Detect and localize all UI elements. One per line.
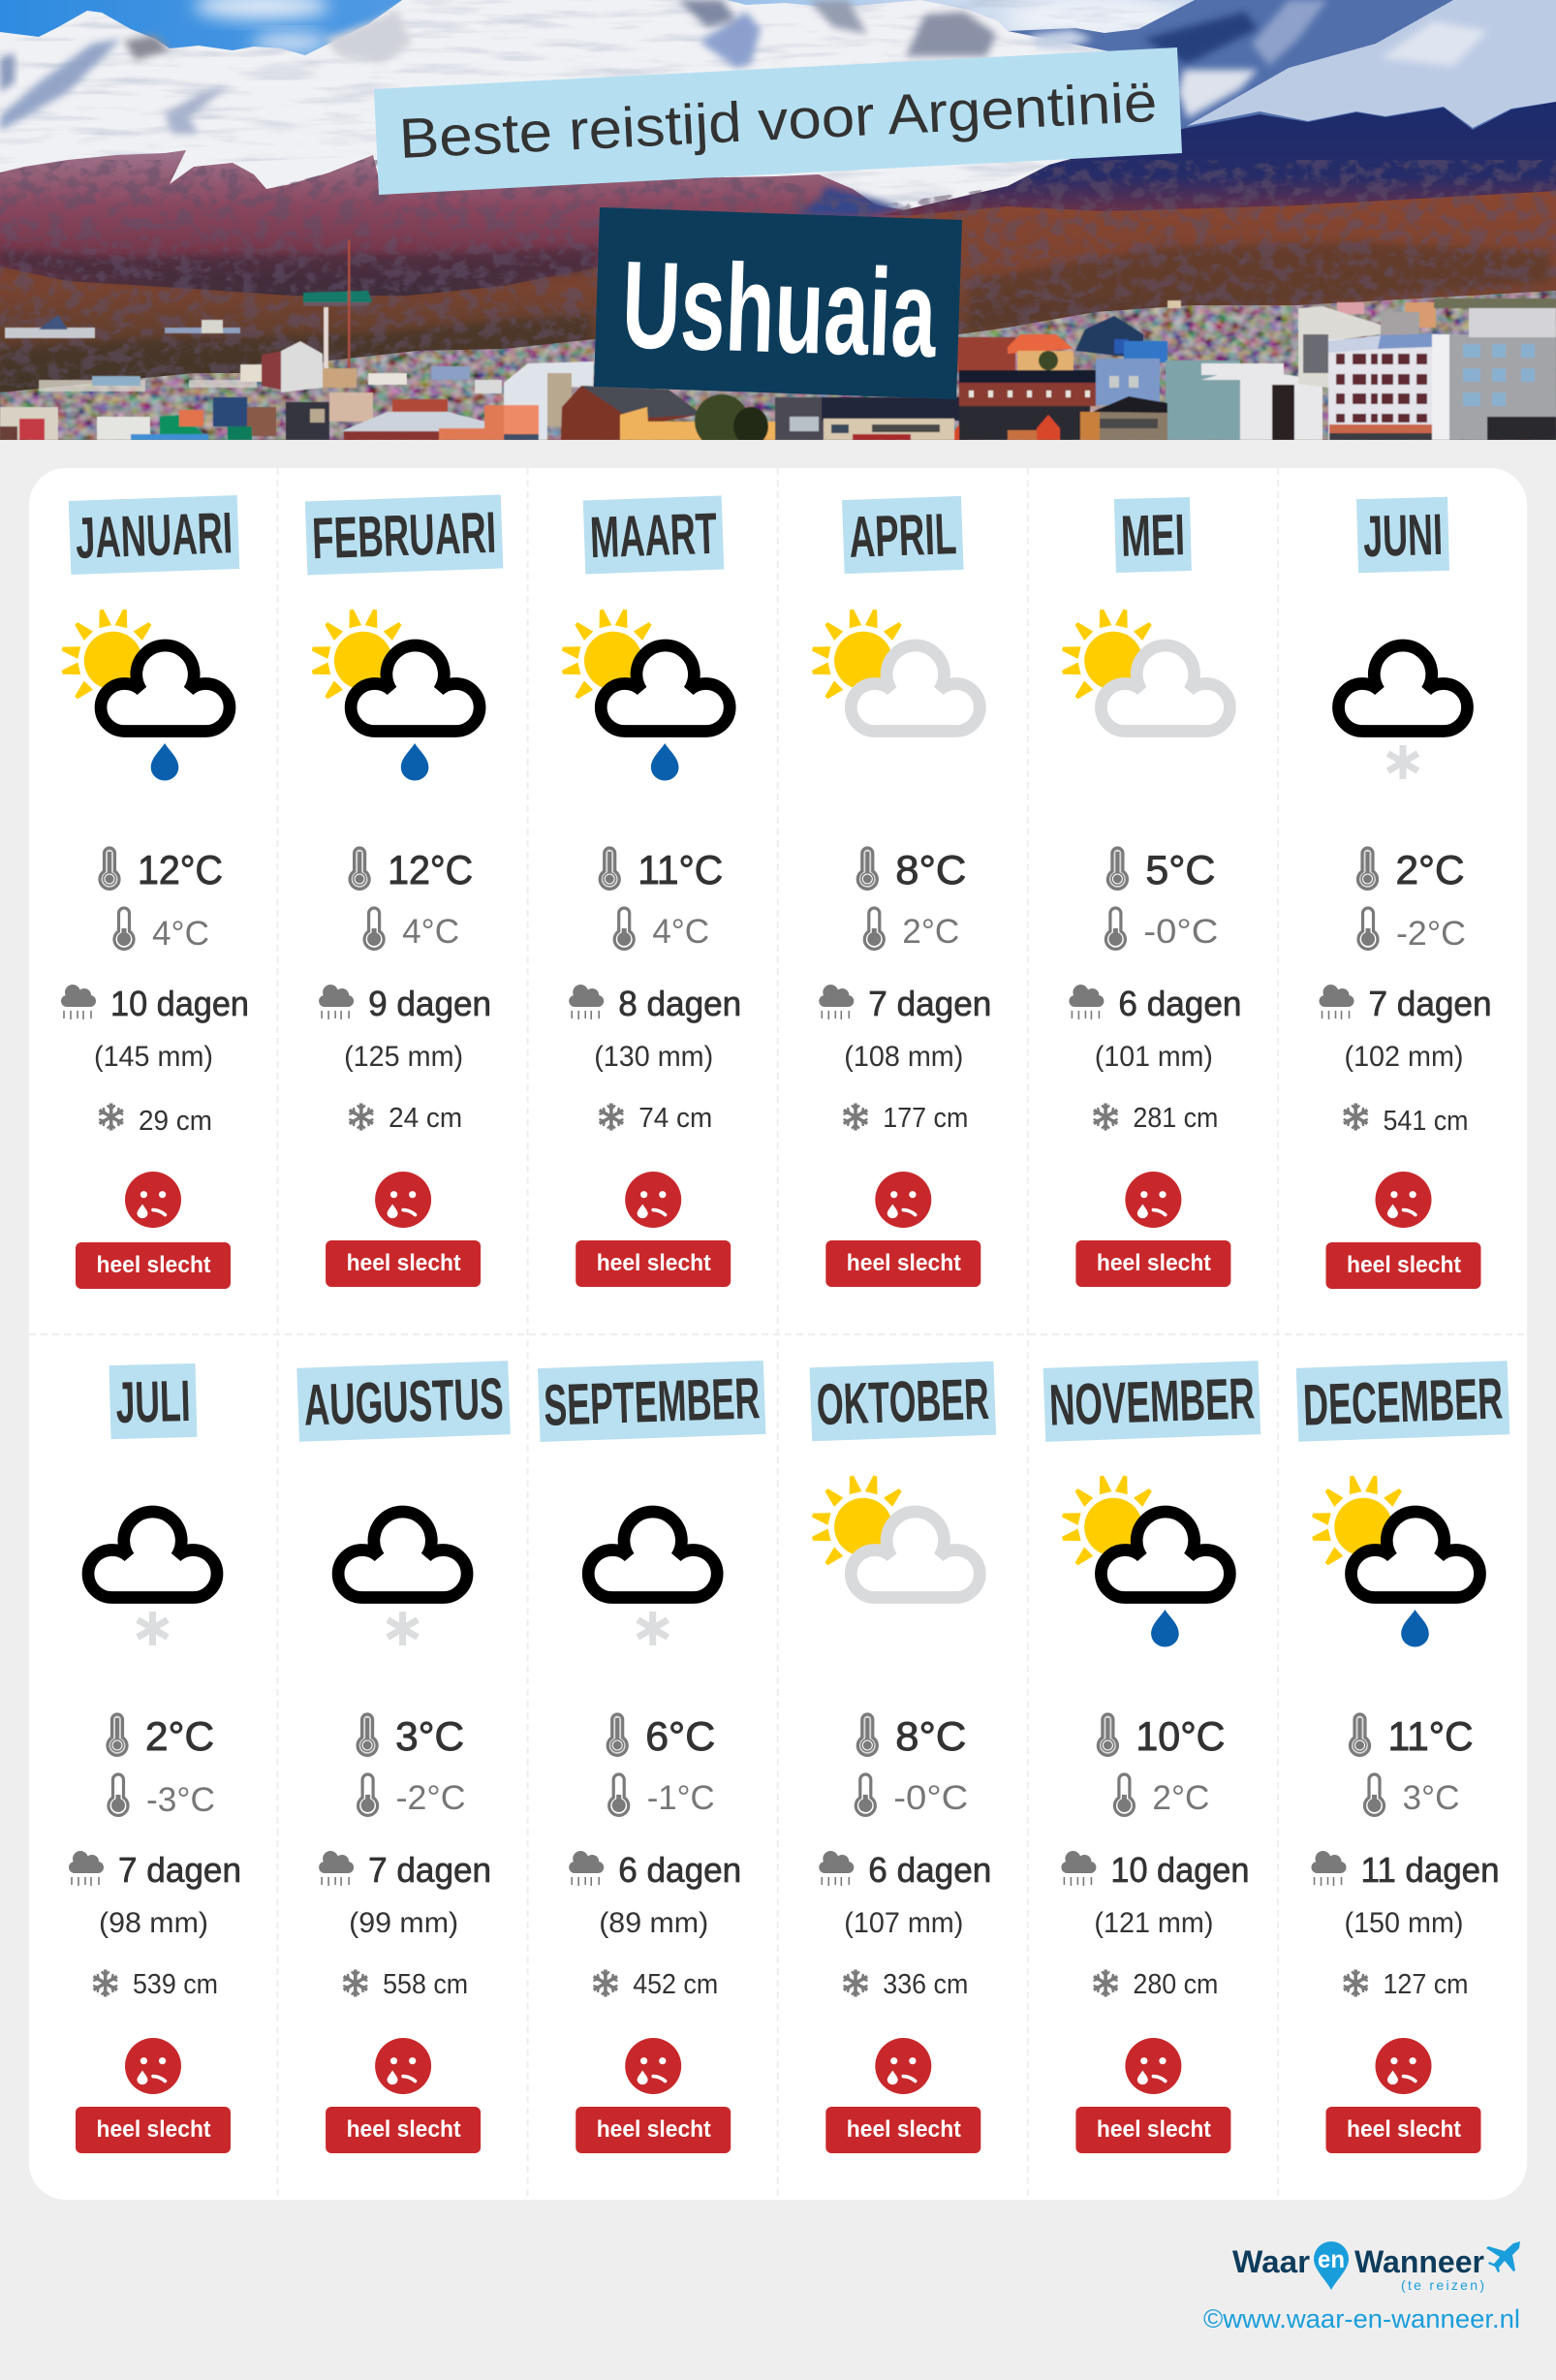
logo: Waar en Wanneer: (te reizen) — [1401, 2277, 1484, 2293]
snowfall: 177 cm — [883, 1103, 968, 1134]
snowfall: 539 cm — [133, 1969, 218, 2000]
weather icon — [1061, 609, 1229, 731]
month label — [810, 1362, 996, 1441]
snowfall — [99, 1103, 212, 1137]
rating badge: heel slecht — [1097, 2116, 1211, 2143]
month label: MAART — [589, 501, 718, 570]
max temperature: 6°C — [645, 1713, 715, 1759]
snowfall — [1094, 1103, 1218, 1134]
max temperature: 11°C — [638, 847, 723, 892]
rain days: 6 dagen — [868, 1850, 991, 1890]
rating badge: heel slecht — [347, 1250, 461, 1276]
rain days: 8 dagen — [618, 984, 741, 1023]
min temperature — [1358, 908, 1466, 953]
max temperature — [350, 847, 473, 892]
rating badge: heel slecht — [347, 2116, 461, 2143]
rating badge: heel slecht — [1097, 1250, 1211, 1276]
month label: NOVEMBER — [1048, 1365, 1256, 1438]
rainfall: (108 mm) — [844, 1041, 963, 1073]
min temperature — [114, 908, 209, 953]
panel: december — [1296, 1361, 1509, 2153]
subtitle banner — [374, 47, 1182, 195]
snowfall — [593, 1969, 718, 2000]
max temperature: 2°C — [1395, 847, 1465, 892]
snowfall: 281 cm — [1133, 1103, 1218, 1134]
rainfall: (89 mm) — [599, 1907, 708, 1939]
max temperature — [108, 1713, 214, 1759]
rating face — [875, 1172, 931, 1228]
snowfall: 127 cm — [1384, 1969, 1469, 2000]
rainfall: (150 mm) — [1345, 1907, 1463, 1939]
month label: SEPTEMBER — [543, 1365, 761, 1438]
weather icon — [1311, 1475, 1479, 1647]
month label — [69, 495, 239, 575]
subtitle banner: Beste reistijd voor Argentinië — [397, 71, 1159, 171]
min temperature — [614, 908, 709, 951]
town right — [957, 298, 1556, 440]
rating badge — [326, 2107, 481, 2153]
panel: januari — [61, 495, 249, 1289]
rain days: 7 dagen — [1368, 984, 1492, 1023]
town left — [0, 240, 504, 440]
rating badge — [76, 2107, 231, 2153]
max temperature — [1351, 1713, 1473, 1759]
rating badge: heel slecht — [847, 2116, 961, 2143]
snowfall — [1344, 1969, 1469, 2000]
max temperature: 8°C — [895, 1713, 966, 1759]
website credit: ©www.waar-en-wanneer.nl — [1203, 2304, 1520, 2333]
panel: mei — [1061, 497, 1241, 1287]
weather icon — [338, 1512, 467, 1645]
min temperature — [856, 1774, 968, 1817]
snowfall: 24 cm — [389, 1103, 462, 1134]
min temperature: -2°C — [396, 1779, 466, 1817]
logo: Waar en Wanneer: Waar — [1232, 2244, 1310, 2279]
snowfall: 541 cm — [1384, 1106, 1469, 1137]
min temperature — [609, 1774, 715, 1817]
rating badge: heel slecht — [597, 1250, 711, 1276]
panel: maart — [561, 496, 741, 1287]
min temperature: -0°C — [893, 1779, 968, 1817]
snowfall: 452 cm — [633, 1969, 718, 2000]
snowfall — [843, 1969, 968, 2000]
rainfall: (125 mm) — [344, 1041, 463, 1073]
month label — [305, 494, 503, 576]
max temperature — [600, 847, 723, 892]
rating badge — [1325, 1242, 1480, 1289]
rain days: 9 dagen — [368, 984, 491, 1023]
min temperature — [364, 908, 459, 951]
rain days: 11 dagen — [1360, 1850, 1500, 1890]
max temperature: 2°C — [145, 1713, 214, 1759]
icon: airplane — [1486, 2241, 1520, 2272]
rain days: 7 dagen — [368, 1850, 491, 1890]
rating badge — [1075, 2107, 1230, 2153]
snowfall — [1094, 1969, 1218, 2000]
max temperature: 8°C — [895, 847, 966, 892]
town centre — [504, 361, 979, 449]
rating badge — [326, 1240, 481, 1287]
rainfall: (102 mm) — [1345, 1041, 1463, 1073]
min temperature: -0°C — [1143, 913, 1218, 951]
panel: juli — [69, 1363, 241, 2153]
header photo: snowy mountains above the town of Ushuaia — [0, 0, 1556, 449]
title banner: Ushuaia — [620, 235, 939, 384]
logo: Waar en Wanneer: en — [1318, 2246, 1345, 2273]
rating face — [1125, 1172, 1181, 1228]
rating face — [625, 1172, 681, 1228]
month label: FEBRUARI — [311, 500, 497, 571]
rating badge — [576, 2107, 731, 2153]
month label: MEI — [1120, 502, 1186, 569]
month label: JULI — [115, 1368, 191, 1435]
weather icon — [811, 609, 980, 731]
month label — [538, 1361, 765, 1442]
min temperature: -1°C — [647, 1779, 715, 1817]
month label: AUGUSTUS — [303, 1365, 505, 1438]
rating face — [1125, 2038, 1181, 2094]
min temperature: 4°C — [402, 913, 459, 951]
month label: APRIL — [848, 501, 957, 570]
rating badge — [825, 1240, 980, 1287]
rating badge: heel slecht — [597, 2116, 711, 2143]
rating badge — [1325, 2107, 1480, 2153]
max temperature: 12°C — [388, 847, 473, 892]
snowfall — [93, 1969, 218, 2000]
max temperature — [857, 1713, 966, 1759]
snowfall: 558 cm — [383, 1969, 468, 2000]
weather icon — [88, 1512, 217, 1645]
month label: OKTOBER — [816, 1366, 990, 1437]
snowfall: 280 cm — [1133, 1969, 1218, 2000]
snowfall — [1344, 1103, 1469, 1137]
max temperature: 3°C — [395, 1713, 464, 1759]
panel: november — [1043, 1361, 1260, 2153]
weather icon — [561, 609, 730, 781]
panel: september — [538, 1361, 765, 2153]
rating face — [1376, 1172, 1432, 1228]
max temperature — [358, 1713, 464, 1759]
rain days: 6 dagen — [618, 1850, 741, 1890]
rating badge: heel slecht — [1347, 2116, 1461, 2143]
min temperature: 3°C — [1403, 1779, 1459, 1817]
logo: Waar en Wanneer — [1232, 2241, 1520, 2293]
rating face — [125, 2038, 181, 2094]
month label — [109, 1363, 197, 1439]
month label — [296, 1361, 511, 1442]
min temperature: 4°C — [652, 913, 709, 951]
panel: juni — [1320, 497, 1492, 1289]
rainfall: (107 mm) — [844, 1907, 963, 1939]
weather icon — [61, 609, 230, 781]
month label: JUNI — [1362, 502, 1444, 569]
weather icon — [588, 1512, 717, 1645]
rating badge — [825, 2107, 980, 2153]
max temperature — [1107, 847, 1215, 892]
rating badge — [576, 1240, 731, 1287]
rain days: 7 dagen — [118, 1850, 241, 1890]
month label — [583, 496, 724, 574]
min temperature — [1364, 1774, 1459, 1817]
panel: oktober — [810, 1362, 996, 2153]
max temperature: 10°C — [1136, 1713, 1225, 1759]
rainfall: (145 mm) — [94, 1041, 213, 1073]
rainfall: (130 mm) — [594, 1041, 713, 1073]
min temperature — [864, 908, 959, 951]
min temperature — [1105, 908, 1218, 951]
rating face — [125, 1172, 181, 1228]
max temperature: 11°C — [1387, 1713, 1473, 1759]
max temperature: 5°C — [1145, 847, 1215, 892]
snowfall — [843, 1103, 968, 1134]
month label — [1114, 497, 1192, 573]
min temperature: 2°C — [902, 913, 959, 951]
max temperature — [857, 847, 966, 892]
rating badge: heel slecht — [847, 1250, 961, 1276]
max temperature — [1098, 1713, 1225, 1759]
snowfall — [349, 1103, 462, 1134]
rainfall: (99 mm) — [349, 1907, 458, 1939]
rainfall: (121 mm) — [1094, 1907, 1213, 1939]
weather icon — [311, 609, 480, 781]
min temperature — [109, 1774, 215, 1819]
logo: Waar en Wanneer: Wanneer — [1354, 2244, 1484, 2279]
min temperature — [358, 1774, 466, 1817]
rating face — [625, 2038, 681, 2094]
rainfall: (98 mm) — [99, 1907, 208, 1939]
max temperature — [607, 1713, 715, 1759]
rain days: 6 dagen — [1118, 984, 1241, 1023]
rain days: 7 dagen — [868, 984, 991, 1023]
weather icon — [1061, 1475, 1229, 1647]
max temperature — [100, 847, 223, 892]
weather icon — [1339, 645, 1467, 779]
rating face — [875, 2038, 931, 2094]
rating badge: heel slecht — [1347, 1252, 1461, 1278]
min temperature: 2°C — [1152, 1779, 1209, 1817]
rain days: 10 dagen — [1110, 1850, 1249, 1890]
rating face — [1376, 2038, 1432, 2094]
snowfall — [599, 1103, 712, 1134]
max temperature — [1358, 847, 1465, 892]
min temperature: -3°C — [146, 1781, 215, 1819]
panel: augustus — [296, 1361, 511, 2153]
min temperature: -2°C — [1396, 915, 1466, 953]
month label — [1356, 497, 1449, 573]
snowfall: 74 cm — [638, 1103, 712, 1134]
month label: JANUARI — [75, 500, 233, 571]
panel: april — [811, 496, 991, 1287]
month label — [1043, 1361, 1260, 1442]
rating badge: heel slecht — [97, 1252, 211, 1278]
snowfall — [343, 1969, 468, 2000]
rainfall: (101 mm) — [1095, 1041, 1213, 1073]
title banner — [594, 207, 962, 399]
rating face — [375, 1172, 431, 1228]
max temperature: 12°C — [138, 847, 223, 892]
snowfall: 29 cm — [139, 1106, 212, 1137]
weather icon — [811, 1475, 980, 1597]
rating badge: heel slecht — [97, 2116, 211, 2143]
snowfall: 336 cm — [883, 1969, 968, 2000]
min temperature — [1114, 1774, 1209, 1817]
month label — [842, 496, 964, 574]
panel: monthly overview card — [29, 468, 1527, 2200]
rain days: 10 dagen — [110, 984, 249, 1023]
rating badge — [76, 1242, 231, 1289]
panel: februari — [305, 494, 503, 1287]
rating face — [375, 2038, 431, 2094]
rating badge — [1075, 1240, 1230, 1287]
min temperature: 4°C — [152, 915, 209, 953]
